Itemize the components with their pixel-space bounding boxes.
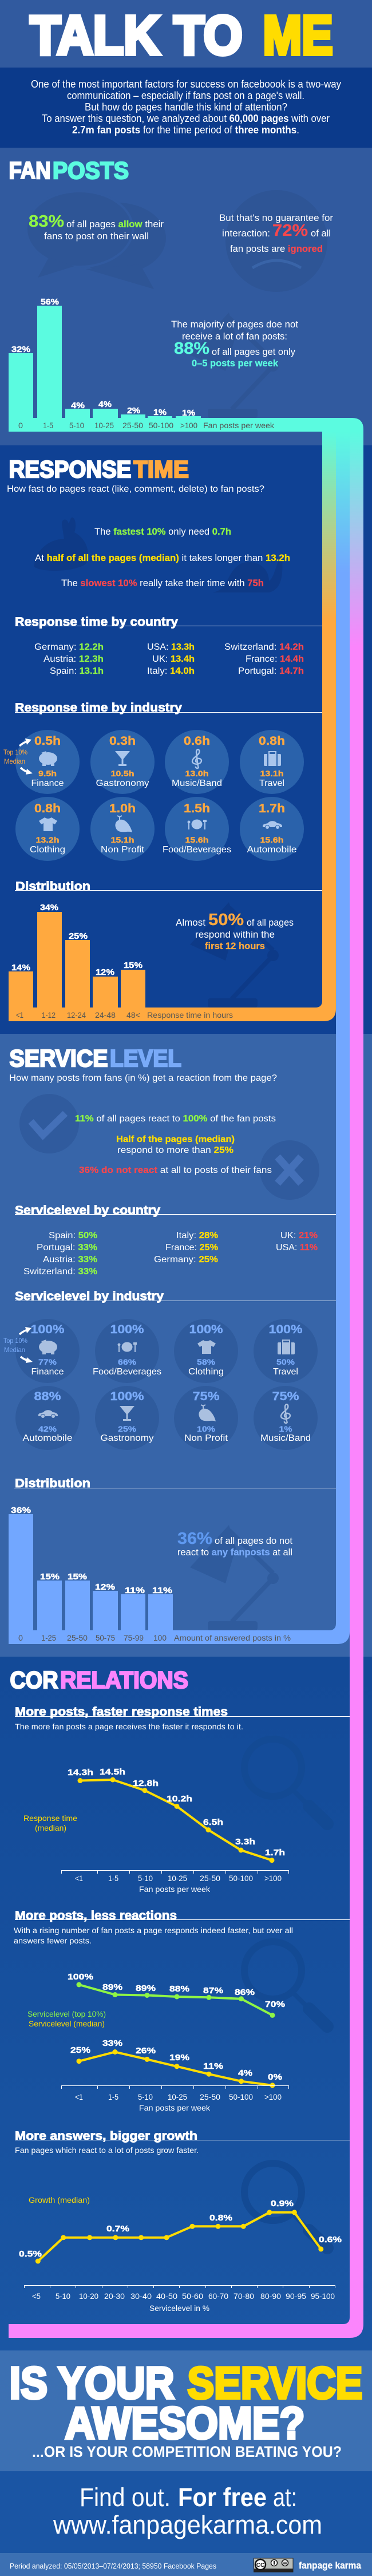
bar chart: response time distribution: 34%	[40, 903, 58, 912]
industry: finance: 77%	[38, 1357, 57, 1366]
heading: fan posts: POSTS	[53, 157, 129, 184]
line chart: service level vs posts: 0%	[268, 2072, 282, 2082]
footer note: Period analyzed: 05/05/2013–07/24/2013; 58950 Facebook Pages	[10, 2562, 216, 2570]
industry: travel	[240, 730, 304, 794]
call to action: For free	[178, 2483, 267, 2512]
heading: more answers bigger growth: More answers, bigger growth	[15, 2129, 197, 2143]
callout: 36% do not react: 36%	[177, 1530, 212, 1548]
call to action	[53, 2483, 322, 2539]
line chart: response time vs posts: 3.3h	[235, 1837, 255, 1847]
country list: service level: Portugal: 33%	[37, 1243, 97, 1253]
industry: gastronomy: 100%	[110, 1390, 144, 1403]
line chart: service level vs posts: 70%	[265, 2000, 285, 2009]
bar chart: response time distribution: 15%	[124, 961, 143, 970]
callout: 72% ignored: of all	[311, 228, 331, 239]
country list: response time: Switzerland: 14.2h	[224, 642, 304, 652]
headline: is your service awesome: IS YOUR	[9, 2357, 174, 2408]
industry: non profit: 75%	[192, 1390, 220, 1403]
bar chart: response time distribution: 48<	[126, 1010, 140, 1020]
industry: food/beverages: 15.6h	[185, 835, 208, 844]
industry: music/band: Music/Band	[172, 779, 222, 788]
heading: service level by industry: Servicelevel by industry	[15, 1290, 164, 1303]
industry: finance: 0.5h	[34, 734, 61, 748]
text: more posts less reactions: With a rising number of fan posts a page responds indeed faster, but over all	[14, 1926, 293, 1935]
line chart: service level vs posts: 33%	[102, 2038, 122, 2048]
sub headline: ...OR IS YOUR COMPETITION BEATING YOU?	[32, 2443, 342, 2460]
ribbon: orange stripe framing the response time section	[9, 424, 336, 1021]
line chart: service level vs posts: 50-100	[229, 2092, 253, 2101]
line chart: service level vs posts: 4%	[238, 2068, 252, 2078]
key stats: service level	[75, 1114, 276, 1175]
line chart: response time vs posts: 10.2h	[167, 1794, 192, 1804]
callout: 88% get few posts: The majority of pages doe not	[171, 319, 298, 330]
country list: response time: UK: 13.4h	[152, 654, 195, 664]
heading: correlations: COR	[10, 1666, 58, 1693]
icon: creative commons badge: CC	[256, 2562, 264, 2569]
industry: gastronomy: 25%	[118, 1424, 137, 1433]
icon: cross circle	[260, 1140, 319, 1200]
line chart: response time vs posts: 14.3h	[68, 1768, 93, 1777]
bar chart: fan posts per week: 4%	[71, 401, 85, 410]
bar chart: response time distribution: 12-24	[67, 1010, 86, 1020]
line chart: growth vs service level: 80-90	[260, 2291, 281, 2301]
country list: response time: Austria: 12.3h	[43, 654, 104, 664]
line chart: response time vs posts: 25-50	[200, 1874, 220, 1883]
intro text: 2.7m fan posts for the time period of three months.	[72, 124, 299, 136]
bar chart: fan posts per week: 32%	[11, 345, 30, 354]
country list: response time: Italy: 14.0h	[147, 666, 195, 676]
line chart: growth vs service level: Servicelevel in %	[149, 2304, 209, 2313]
key stats: response time: The fastest 10% only need 0.7h	[94, 526, 231, 537]
bar chart: fan posts per week: 2%	[127, 406, 140, 416]
line chart: service level vs posts: 26%	[136, 2046, 156, 2056]
line chart: response time vs posts: Response time	[23, 1814, 77, 1823]
line chart: service level vs posts: 100%	[68, 1972, 93, 1982]
icon: rabbit	[34, 517, 88, 571]
call to action: at:	[273, 2483, 297, 2512]
callout: almost 50%: first 12 hours	[205, 941, 265, 951]
callout: almost 50%: 50%	[208, 911, 244, 929]
intro text: One of the most important factors for success on faceboook is a two-way	[31, 78, 341, 90]
country list: response time: Spain: 13.1h	[50, 666, 104, 676]
line chart: response time vs posts: 50-100	[229, 1874, 253, 1883]
bar chart: service level distribution: 12%	[95, 1582, 115, 1592]
key stats: response time: The slowest 10% really take their time with 75h	[61, 578, 264, 588]
heading: fan posts	[9, 157, 129, 184]
line chart: growth vs service level: 5-10	[56, 2291, 70, 2301]
icon: check mark circle	[19, 1094, 79, 1153]
country list: service level: Germany: 25%	[154, 1255, 218, 1265]
line chart: service level vs posts: 25-50	[200, 2092, 220, 2101]
callout: almost 50%	[176, 911, 294, 951]
country list: response time: Portugal: 14.7h	[238, 666, 304, 676]
industry: clothing: 13.2h	[35, 835, 60, 844]
key stats: service level: 11% of all pages react to 100% of the fan posts	[75, 1114, 276, 1124]
industry: automobile	[240, 797, 304, 861]
industry: music/band: 75%	[272, 1390, 299, 1403]
icon: magnifying glass	[244, 1739, 327, 1824]
industry: food/beverages: 66%	[118, 1357, 137, 1366]
heading: service level: LEVEL	[110, 1045, 181, 1072]
line chart: growth vs service level: 60-70	[208, 2291, 228, 2301]
bar chart: response time distribution	[9, 903, 233, 1020]
line chart: response time vs posts: <1	[75, 1874, 83, 1883]
line chart: growth vs service level: 95-100	[311, 2291, 335, 2301]
industry: gastronomy: Gastronomy	[96, 779, 149, 788]
industry: automobile: 1.7h	[259, 802, 285, 815]
line chart: service level vs posts: Fan posts per week	[139, 2103, 211, 2112]
industry: finance: Finance	[31, 1367, 64, 1377]
bar chart: response time distribution: 12%	[96, 967, 114, 977]
text: more posts less reactions: answers fewer posts.	[14, 1936, 92, 1945]
heading: service level	[9, 1045, 181, 1072]
industry: clothing: Clothing	[188, 1367, 224, 1377]
industry: music/band	[254, 1386, 318, 1450]
bar chart: fan posts per week: 25-50	[122, 421, 143, 430]
line chart: service level vs posts: Servicelevel (median)	[29, 2019, 105, 2028]
logo: fanpage karma: fanpage karma	[299, 2560, 361, 2571]
country list: service level: UK: 21%	[280, 1231, 318, 1240]
legend: top 10% and median arrows: Top 10%	[3, 1337, 27, 1345]
heading: response time by country: Response time by country	[15, 615, 178, 629]
industry: music/band: 1%	[279, 1424, 292, 1433]
industry: clothing: Clothing	[30, 845, 65, 855]
icon: desk lamp	[190, 1525, 279, 1630]
intro text: communication – especially if fans post on a page's wall.	[67, 90, 304, 101]
heading: response time: TIME	[133, 456, 189, 483]
bar chart: fan posts per week: 1-5	[43, 421, 53, 430]
industry: gastronomy: 0.3h	[109, 734, 136, 748]
bar chart: fan posts per week: 4%	[98, 400, 112, 409]
icon: sad face	[225, 190, 327, 292]
country list: service level: USA: 11%	[276, 1243, 318, 1253]
callout: 36% do not react	[177, 1530, 292, 1558]
callout: 72% ignored: interaction:	[222, 228, 270, 239]
text: more posts faster response: The more fan posts a page receives the faster it responds to it.	[15, 1722, 243, 1731]
title: ME	[263, 5, 333, 66]
heading: service level: SERVICE	[9, 1045, 108, 1072]
industry: finance: Finance	[31, 779, 64, 788]
text: more answers bigger growth: Fan pages which react to a lot of posts grow faster.	[15, 2146, 199, 2155]
callout: 36% do not react: of all pages do not	[215, 1535, 292, 1546]
line chart: growth vs service level: 70-80	[234, 2291, 254, 2301]
industry: finance	[15, 1319, 80, 1383]
line chart: service level vs posts: 25%	[70, 2045, 90, 2055]
line chart: response time vs posts: 5-10	[138, 1874, 153, 1883]
bar chart: fan posts per week: 50-100	[149, 421, 173, 430]
line chart: growth vs service level: 0.5%	[19, 2249, 42, 2259]
industry: non profit: 10%	[197, 1424, 216, 1433]
legend: top 10% and median arrows: Median	[4, 757, 25, 765]
line chart: response time vs posts: (median)	[35, 1823, 66, 1832]
industry: music/band: 13.0h	[185, 769, 208, 778]
line chart: response time vs posts: Fan posts per week	[139, 1884, 211, 1894]
call to action: www.fanpagekarma.com	[53, 2510, 322, 2539]
industry: travel: 50%	[276, 1357, 295, 1366]
industry: automobile: Automobile	[247, 845, 297, 855]
icon: desk lamp	[190, 902, 279, 1008]
country list: service level: Italy: 28%	[176, 1231, 218, 1240]
industry: travel: Travel	[259, 779, 284, 788]
icon: magnifying glass	[244, 2163, 327, 2248]
line chart: service level vs posts: 19%	[169, 2053, 189, 2063]
call to action: Find out.	[80, 2483, 171, 2512]
bar chart: service level distribution: 100	[153, 1633, 167, 1642]
icon: speech bubbles	[26, 191, 166, 289]
callout: 83% allow posts: of all pages allow their	[66, 219, 164, 230]
industry: music/band: Music/Band	[260, 1433, 311, 1443]
line chart: service level vs posts: <1	[75, 2092, 83, 2101]
industry: food/beverages: 1.5h	[184, 802, 210, 815]
intro text: To answer this question, we analyzed about 60,000 pages with over	[42, 113, 330, 124]
industry: music/band	[165, 730, 229, 794]
heading: distribution service level: Distribution	[15, 1477, 90, 1490]
key stats: service level: 36% do not react at all to posts of their fans	[79, 1165, 272, 1175]
industry: gastronomy: 10.5h	[111, 769, 134, 778]
bar chart: response time distribution: Response time in hours	[147, 1010, 233, 1020]
line chart: service level vs posts: 86%	[235, 1988, 255, 1997]
industry: finance	[15, 730, 80, 794]
line chart: growth vs service level: Growth (median)	[29, 2195, 90, 2204]
line chart: response time vs posts	[23, 1767, 288, 1894]
line chart: response time vs posts: 1.7h	[265, 1848, 285, 1858]
bar chart: fan posts per week: >100	[180, 421, 197, 430]
industry: travel: 13.1h	[260, 769, 284, 778]
heading: fan posts: FAN	[9, 157, 50, 184]
headline: is your service awesome: AWESOME?	[65, 2397, 304, 2448]
line chart: growth vs service level: 90-95	[286, 2291, 306, 2301]
bar chart: service level distribution: 36%	[11, 1506, 31, 1515]
industry: food/beverages	[93, 1319, 161, 1383]
line chart: service level vs posts: 89%	[136, 1984, 156, 1993]
country list: service level: Spain: 50%	[49, 1231, 97, 1240]
title: TALK TO	[30, 5, 243, 66]
country list: service level: Switzerland: 33%	[23, 1267, 97, 1277]
bar chart: fan posts per week: 10-25	[94, 421, 114, 430]
industry: automobile: 88%	[34, 1390, 61, 1403]
line chart: response time vs posts: >100	[264, 1874, 282, 1883]
bar chart: service level distribution: 15%	[68, 1572, 87, 1582]
industry: non profit	[174, 1386, 238, 1450]
heading: response time by industry: Response time by industry	[15, 701, 182, 714]
callout: almost 50%: Almost	[176, 917, 205, 928]
country list: service level: Austria: 33%	[43, 1255, 97, 1265]
bar chart: fan posts per week: 1%	[182, 408, 195, 418]
country list: response time: USA: 13.3h	[147, 642, 195, 652]
icon: magnifying glass	[244, 1942, 327, 2026]
heading: more posts faster response: More posts, faster response times	[15, 1705, 228, 1718]
line chart: response time vs posts: 6.5h	[203, 1818, 223, 1827]
heading: service level by country: Servicelevel by country	[15, 1204, 160, 1217]
industry: clothing: 58%	[197, 1357, 216, 1366]
industry: non profit: Non Profit	[101, 845, 145, 855]
industry: automobile: 15.6h	[260, 835, 284, 844]
text: more posts less reactions	[14, 1926, 293, 1945]
line chart: response time vs posts: 1-5	[108, 1874, 118, 1883]
line chart: service level vs posts: 89%	[102, 1982, 122, 1992]
industry: non profit: Non Profit	[184, 1433, 228, 1443]
country list: response time: France: 14.4h	[246, 654, 304, 664]
callout: 83% allow posts	[29, 212, 164, 242]
bar chart: service level distribution: 50-75	[96, 1633, 115, 1642]
callout: 72% ignored: 72%	[272, 222, 308, 240]
line chart: growth vs service level: 0.6%	[319, 2235, 342, 2245]
industry: gastronomy: Gastronomy	[101, 1433, 153, 1443]
bar chart: response time distribution: 24-48	[95, 1010, 116, 1020]
callout: 36% do not react: react to any fanposts at all	[177, 1547, 292, 1558]
key stats: service level: Half of the pages (median)	[116, 1135, 235, 1144]
line chart: growth vs service level: 0.9%	[271, 2199, 294, 2208]
heading: correlations: RELATIONS	[60, 1666, 188, 1693]
callout: almost 50%: respond within the	[195, 929, 275, 940]
industry: food/beverages: 100%	[110, 1323, 144, 1336]
callout: 88% get few posts: of all pages get only	[212, 346, 295, 357]
key stats: response time	[35, 526, 290, 588]
line chart: service level vs posts	[27, 1972, 288, 2112]
bar chart: service level distribution: 75-99	[124, 1633, 144, 1642]
bar chart: service level distribution: 1-25	[41, 1633, 56, 1642]
bar chart: fan posts per week: 0	[18, 421, 23, 430]
intro text	[31, 78, 341, 136]
industry: food/beverages: Food/Beverages	[163, 845, 231, 855]
line chart: service level vs posts: 11%	[203, 2061, 223, 2071]
line chart: service level vs posts: >100	[264, 2092, 282, 2101]
industry: clothing: 100%	[189, 1323, 223, 1336]
bar chart: response time distribution: <1	[16, 1010, 23, 1020]
industry: travel: Travel	[273, 1367, 298, 1377]
bar chart: service level distribution: 0	[18, 1633, 23, 1642]
legend: top 10% and median arrows: Median	[4, 1346, 25, 1354]
industry: travel: 0.8h	[259, 734, 285, 748]
headline: is your service awesome	[9, 2357, 363, 2448]
industry grid: response time	[15, 730, 304, 861]
legend: top 10% and median arrows: Top 10%	[3, 748, 27, 756]
bar chart: service level distribution: 25-50	[67, 1633, 88, 1642]
bar chart: service level distribution: 11%	[125, 1586, 145, 1595]
line chart: service level vs posts: 5-10	[138, 2092, 153, 2101]
line chart: service level vs posts: 1-5	[108, 2092, 118, 2101]
industry: non profit: 15.1h	[111, 835, 134, 844]
legend: top 10% and median arrows	[3, 738, 33, 775]
bar chart: fan posts per week: 1%	[153, 408, 167, 417]
line chart: service level vs posts: 10-25	[168, 2092, 187, 2101]
industry: automobile: 42%	[38, 1424, 57, 1433]
bar chart: response time distribution: 25%	[69, 931, 88, 941]
callout: 88% get few posts: 88%	[174, 339, 209, 358]
industry: non profit	[90, 797, 155, 861]
ribbon: pink stripe framing the correlations section	[9, 418, 363, 2338]
heading: correlations	[10, 1666, 188, 1693]
country list: response time: Germany: 12.2h	[34, 642, 104, 652]
industry: gastronomy	[90, 730, 155, 794]
line chart: response time vs posts: 10-25	[168, 1874, 187, 1883]
icon: creative commons badge	[254, 2558, 293, 2572]
callout: almost 50%: of all pages	[247, 917, 294, 928]
subtitle: response time: How fast do pages react (like, comment, delete) to fan posts?	[7, 484, 264, 494]
industry: clothing	[15, 797, 80, 861]
industry: finance: 100%	[31, 1323, 65, 1336]
heading: response time: RESPONSE	[9, 456, 132, 483]
industry: clothing	[174, 1319, 238, 1383]
callout: 72% ignored: fan posts are ignored	[230, 243, 323, 254]
bar chart: service level distribution: 15%	[40, 1572, 60, 1582]
ribbon: blue stripe framing the service level section	[9, 424, 350, 1644]
line chart: growth vs service level: 10-20	[79, 2291, 98, 2301]
industry: travel: 100%	[269, 1323, 303, 1336]
callout: 88% get few posts	[171, 319, 298, 369]
country list: service level: France: 25%	[165, 1243, 218, 1253]
heading: more posts less reactions: More posts, less reactions	[15, 1909, 177, 1922]
line chart: response time vs posts: 12.8h	[133, 1779, 159, 1788]
bar chart: service level distribution: Amount of answered posts in %	[174, 1633, 291, 1642]
industry: gastronomy	[95, 1386, 159, 1450]
line chart: growth vs service level	[19, 2195, 342, 2313]
line chart: growth vs service level: <5	[32, 2291, 41, 2301]
bar chart: fan posts per week: 5-10	[69, 421, 84, 430]
icon: desk lamp	[190, 313, 279, 418]
industry grid: service level	[15, 1319, 318, 1450]
industry: automobile	[15, 1386, 80, 1450]
heading: distribution response: Distribution	[15, 880, 90, 893]
callout: 72% ignored	[219, 212, 333, 254]
key stats: response time: At half of all the pages (median) it takes longer than 13.2h	[35, 552, 290, 563]
callout: 83% allow posts: 83%	[29, 212, 64, 231]
line chart: growth vs service level: 30-40	[130, 2291, 152, 2301]
bar chart: response time distribution: 1-12	[42, 1010, 56, 1020]
bar chart: fan posts per week: Fan posts per week	[203, 421, 275, 430]
industry: automobile: Automobile	[23, 1433, 73, 1443]
line chart: response time vs posts: 14.5h	[100, 1767, 125, 1777]
country list: response time	[34, 642, 304, 676]
industry: non profit: 1.0h	[109, 802, 136, 815]
callout: 72% ignored: But that's no guarantee for	[219, 212, 333, 223]
country list: service level	[23, 1231, 318, 1277]
industry: travel	[254, 1319, 318, 1383]
line chart: service level vs posts: 87%	[203, 1986, 223, 1996]
legend: top 10% and median arrows	[3, 1327, 33, 1363]
intro text: But how do pages handle this kind of attention?	[85, 101, 287, 113]
line chart: growth vs service level: 20-30	[104, 2291, 125, 2301]
bar chart: fan posts per week: 56%	[41, 297, 59, 307]
bar chart: service level distribution: 11%	[152, 1586, 172, 1595]
icon: snail	[213, 558, 282, 592]
line chart: growth vs service level: 50-60	[182, 2291, 203, 2301]
line chart: service level vs posts: 88%	[169, 1984, 189, 1994]
line chart: service level vs posts: Servicelevel (top 10%)	[27, 2009, 106, 2018]
line chart: growth vs service level: 0.8%	[209, 2213, 232, 2223]
industry: music/band: 0.6h	[184, 734, 210, 748]
bar chart: service level distribution	[9, 1506, 291, 1642]
industry: food/beverages	[163, 797, 231, 861]
key stats: service level: respond to more than 25%	[117, 1145, 234, 1155]
callout: 88% get few posts: 0–5 posts per week	[192, 358, 279, 369]
bar chart: response time distribution: 14%	[11, 963, 30, 973]
bar chart: fan posts per week	[9, 297, 275, 430]
callout: 88% get few posts: receive a lot of fan posts:	[182, 331, 287, 342]
callout: 83% allow posts: fans to post on their wall	[44, 231, 149, 242]
line chart: growth vs service level: 40-50	[156, 2291, 177, 2301]
line chart: growth vs service level: 0.7%	[106, 2224, 129, 2234]
subtitle: service level: How many posts from fans (in %) get a reaction from the page?	[9, 1073, 277, 1083]
industry: food/beverages: Food/Beverages	[93, 1367, 161, 1377]
industry: finance: 9.5h	[38, 769, 57, 778]
industry: clothing: 0.8h	[34, 802, 61, 815]
